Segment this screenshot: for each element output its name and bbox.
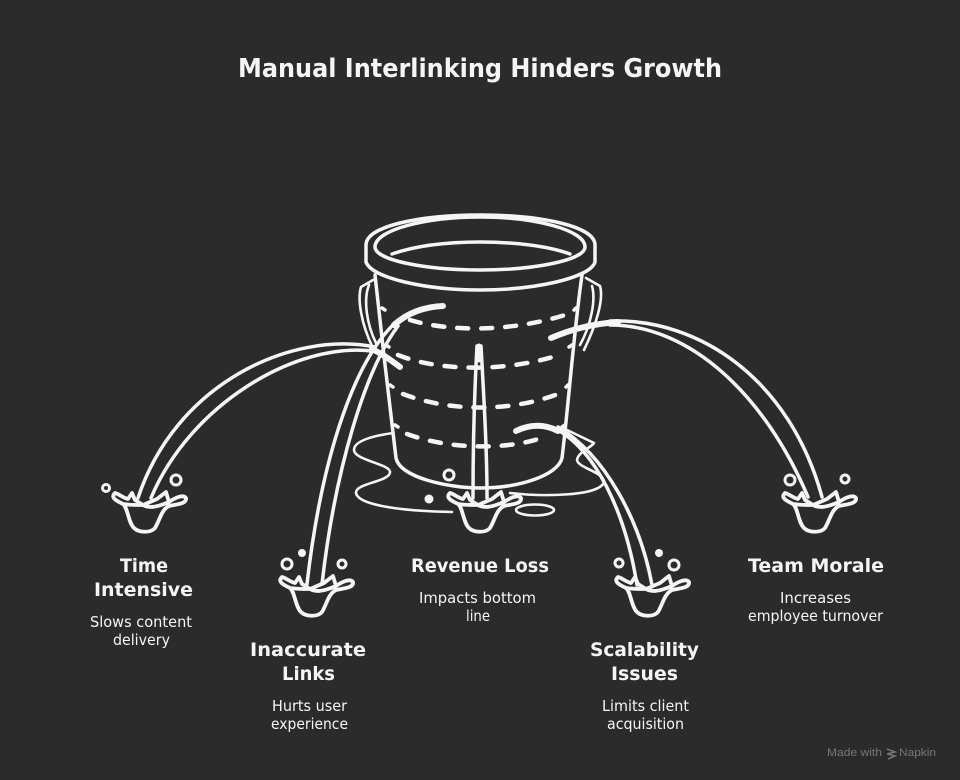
splash: Team Morale <box>783 475 856 532</box>
label: Inaccurate Links: Links <box>282 663 335 685</box>
leak stream: Scalability Issues <box>516 426 652 585</box>
watermark: Made with Napkin: Made with <box>827 747 882 759</box>
label: Scalability Issues: Issues <box>611 663 678 685</box>
label: Team Morale: Increases <box>780 589 851 607</box>
label: Time Intensive: delivery <box>113 631 170 649</box>
leak stream: Inaccurate Links <box>307 306 443 584</box>
label: Inaccurate Links <box>250 639 366 733</box>
bucket water level dashes <box>398 315 565 446</box>
title: Manual Interlinking Hinders Growth <box>238 54 722 84</box>
label: Revenue Loss: Revenue Loss <box>411 555 549 577</box>
splash: Inaccurate Links <box>280 549 353 616</box>
label: Time Intensive: Slows content <box>90 613 192 631</box>
bucket handles <box>360 278 601 350</box>
label: Team Morale <box>748 555 884 625</box>
label: Scalability Issues: Scalability <box>590 639 700 661</box>
label: Revenue Loss: line <box>466 607 490 625</box>
label: Revenue Loss: Impacts bottom <box>419 589 536 607</box>
label: Time Intensive <box>90 555 193 649</box>
splash: Scalability Issues <box>615 549 689 616</box>
label: Inaccurate Links: Inaccurate <box>250 639 366 661</box>
leak stream: Team Morale <box>551 321 822 497</box>
watermark: Made with Napkin <box>827 747 936 759</box>
puddle under bucket <box>354 430 604 516</box>
bucket body <box>375 275 582 488</box>
label: Scalability Issues <box>590 639 700 733</box>
splash: Revenue Loss <box>424 470 521 532</box>
watermark: Made with Napkin: Napkin <box>899 747 936 759</box>
label: Scalability Issues: acquisition <box>607 715 684 733</box>
label: Team Morale: Team Morale <box>748 555 884 577</box>
leak stream: Time Intensive <box>138 344 400 498</box>
bucket rim <box>366 215 595 290</box>
label: Revenue Loss <box>411 555 549 625</box>
splash: Time Intensive <box>102 475 186 532</box>
label: Team Morale: employee turnover <box>748 607 884 625</box>
label: Inaccurate Links: experience <box>271 715 348 733</box>
label: Inaccurate Links: Hurts user <box>272 697 348 715</box>
label: Scalability Issues: Limits client <box>602 697 689 715</box>
puddle droplet oval <box>516 504 554 516</box>
leak stream: Revenue Loss <box>473 346 487 498</box>
label: Time Intensive: Intensive <box>94 579 193 601</box>
bucket <box>360 215 601 488</box>
label: Time Intensive: Time <box>120 555 168 577</box>
